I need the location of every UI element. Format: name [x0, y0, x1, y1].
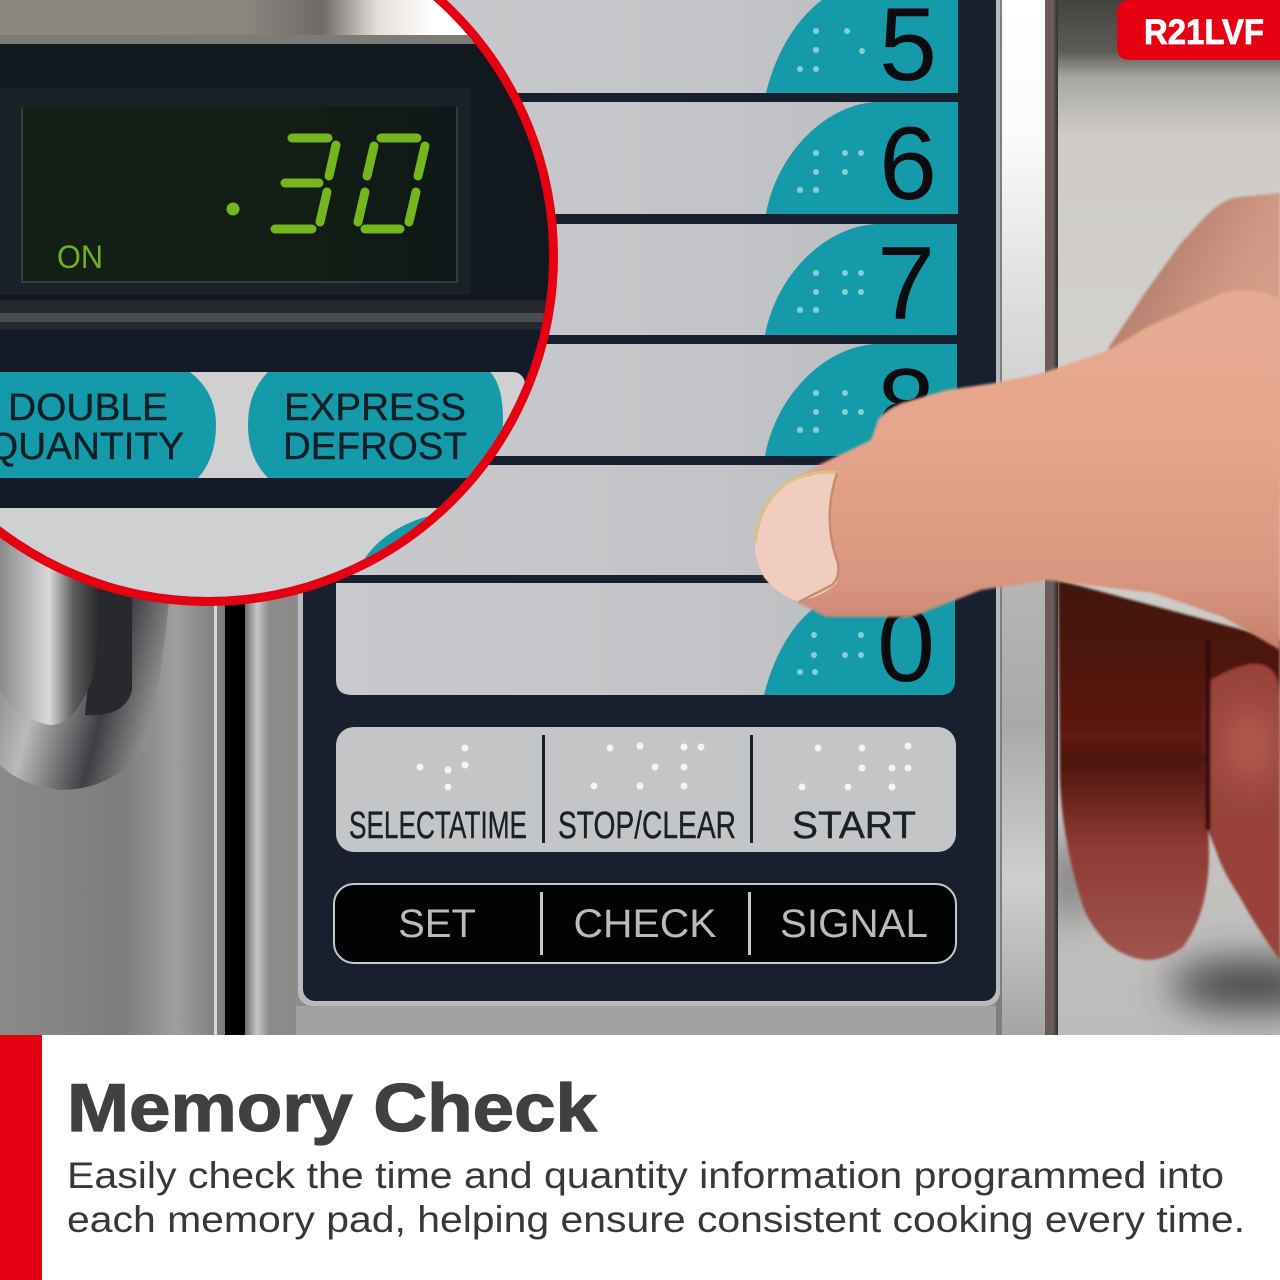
thumbnail: [755, 472, 839, 602]
door gap: [225, 590, 245, 1035]
label: start: START: [792, 805, 916, 847]
panel: LCD display: [0, 88, 471, 295]
function keys: set, check, signal: CHECK: [574, 902, 717, 946]
silver strip with memory pads: [190, 372, 525, 478]
key 5: [446, 0, 958, 93]
bezel ridge: [0, 300, 560, 330]
steel strip top: [0, 0, 472, 40]
label: stop/clear: STOP/CLEAR: [558, 805, 736, 847]
body text: each memory pad, helping ensure consistent cooking every time.: [67, 1199, 1245, 1240]
back of hand: [1109, 193, 1280, 500]
label: select a time: SELECTATIME: [349, 805, 527, 847]
key 6: [522, 102, 958, 214]
key 6: 6: [879, 106, 937, 222]
number keys: [336, 0, 958, 704]
icon: door handle: [0, 530, 173, 790]
label: double quantity: DOUBLE: [8, 387, 168, 429]
model badge: R21LVF: [1144, 13, 1264, 52]
blurred background right: [1052, 0, 1280, 1035]
hand pressing key: [755, 193, 1280, 960]
red accent bar: [0, 1035, 42, 1280]
key blank: [352, 465, 823, 575]
key 0: 0: [877, 588, 935, 704]
key 7: [549, 224, 957, 335]
magnifier lens: [0, 0, 560, 618]
function keys: select a time, stop/clear, start: [336, 727, 956, 852]
key 8: [495, 344, 957, 456]
braille dots: [416, 742, 912, 790]
left steel door: [48, 604, 225, 1035]
key 7: 7: [877, 226, 935, 342]
model badge: [1117, 0, 1280, 60]
function keys: set, check, signal: SET: [398, 902, 476, 946]
index finger: [755, 290, 1280, 650]
next row: [0, 508, 438, 597]
text: ON indicator: ON: [57, 239, 103, 275]
key 0: [336, 583, 955, 704]
palm and lower fingers: [1058, 580, 1280, 960]
key 8: 8: [877, 348, 935, 464]
braille dots on number keys: [797, 28, 865, 675]
body text: Easily check the time and quantity information programmed into: [67, 1155, 1224, 1196]
function keys: set, check, signal: SIGNAL: [780, 902, 928, 946]
panel: dark navy keypad: [298, 0, 1000, 1006]
caption panel: [0, 1035, 1280, 1280]
magnifier lens: DEFROST: [283, 426, 467, 468]
label: express defrost: EXPRESS: [284, 387, 466, 429]
body text: [67, 1155, 1245, 1240]
panel: black bezel: [0, 44, 560, 330]
text: time digits: [226, 138, 425, 229]
heading: Memory Check: [67, 1070, 597, 1146]
steel fascia: [245, 601, 268, 1035]
function keys: set, check, signal: [334, 884, 956, 963]
